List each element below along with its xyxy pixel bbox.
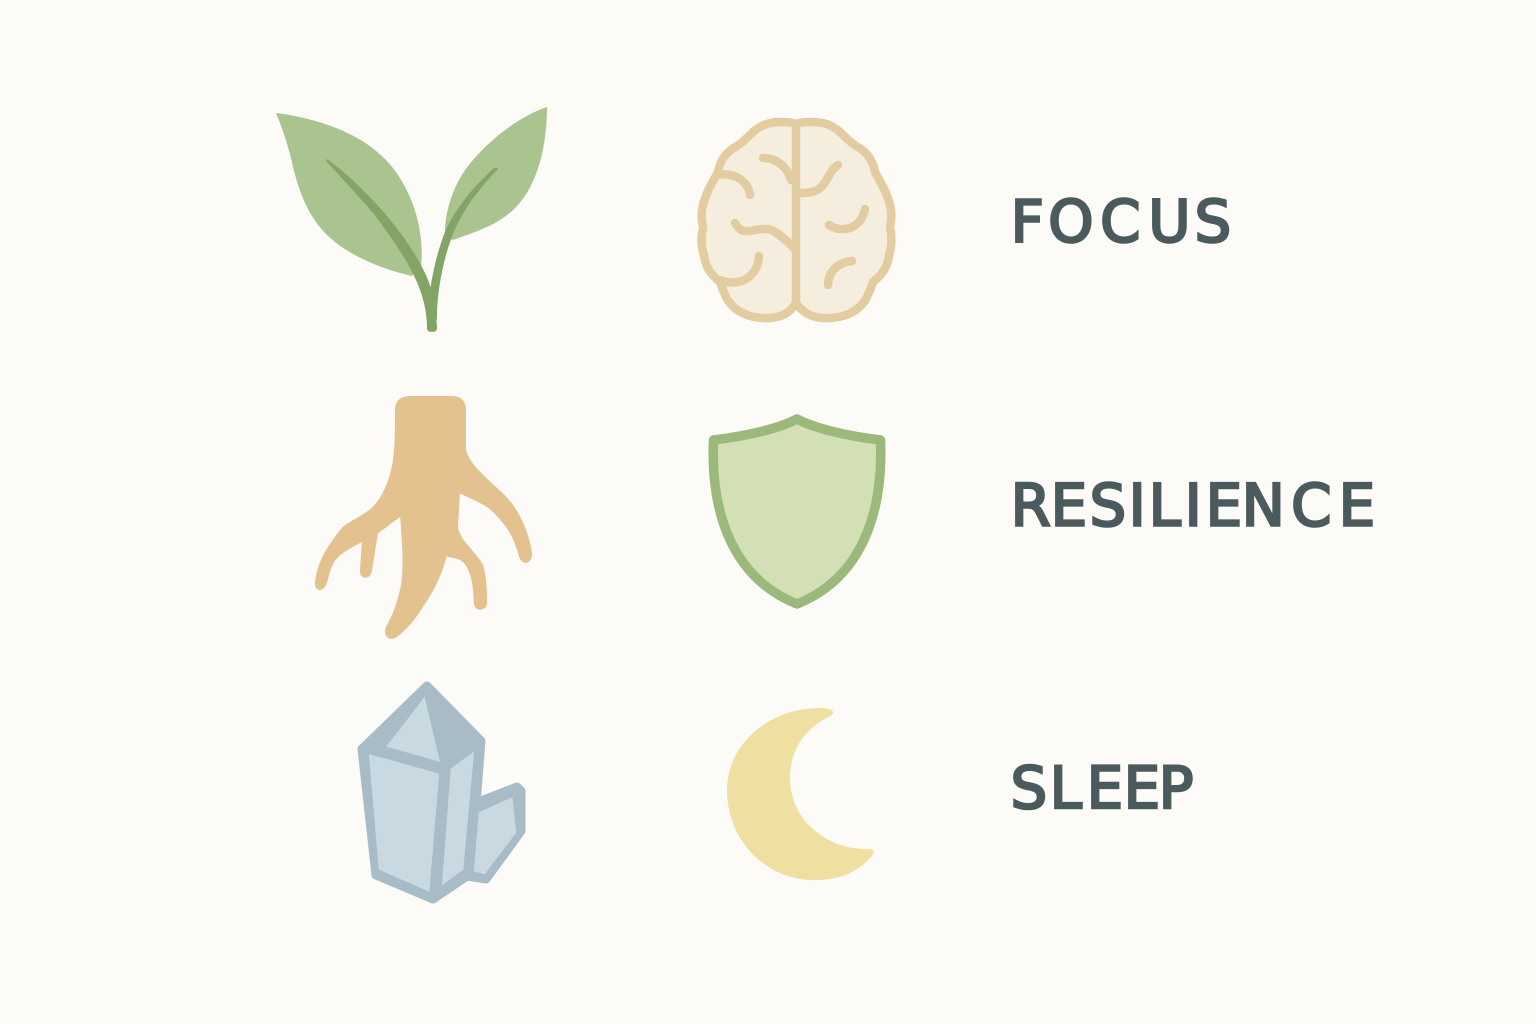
front facet [368,753,440,893]
icon: brain [702,122,891,318]
crystal outline [362,686,521,899]
icon: crescent moon [727,708,874,880]
icon: shield [713,419,881,604]
icon: tea leaves [276,107,547,332]
right leaf [445,107,547,240]
small crystal facet [473,796,517,875]
left vein and stem [326,159,437,332]
top facet [385,695,441,763]
right vein and stem [429,167,498,320]
label: resilience: RESILIENCE [1011,472,1375,540]
icon: root [316,397,531,638]
center fissure [792,124,800,303]
left leaf [276,113,422,276]
icon: crystal [362,686,521,899]
brain outline [702,122,891,318]
label: focus: FOCUS [1011,188,1231,256]
label: sleep: SLEEP [1011,755,1193,822]
brain folds [763,158,791,180]
side facet [441,750,475,887]
